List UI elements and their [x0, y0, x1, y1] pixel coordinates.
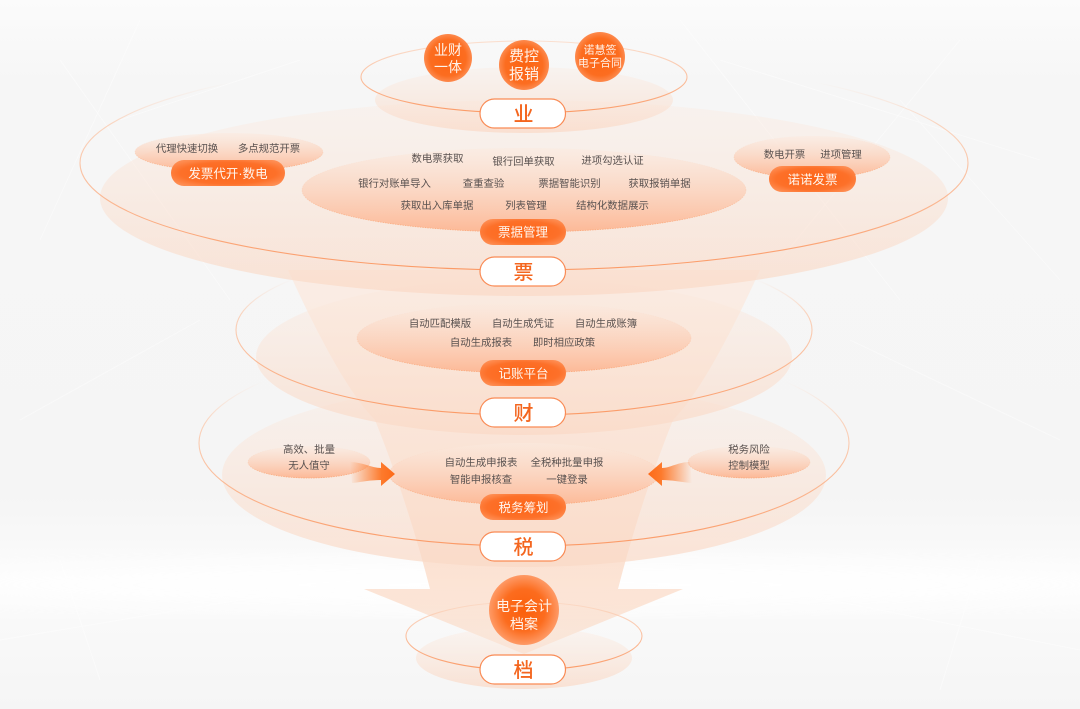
label pill: 税 — [480, 532, 566, 561]
label pill: 税: 税 — [514, 536, 534, 559]
disc: 财 — [256, 279, 792, 435]
panel: 诺诺发票: 数电开票 — [764, 148, 805, 161]
panel: 票据管理: 票据智能识别 — [538, 177, 601, 190]
circle: 诺慧签电子合同: 诺慧签 — [584, 42, 616, 56]
panel: 税务风险控制模型: 税务风险 — [728, 443, 770, 456]
panel: 票据管理: 银行回单获取 — [492, 155, 555, 168]
circle: 电子会计档案: 电子会计 — [496, 598, 552, 614]
panel: 记账平台: 自动匹配模版 — [409, 317, 471, 330]
circle: 诺慧签电子合同 — [575, 32, 625, 82]
panel: 票据管理: 结构化数据展示 — [576, 199, 649, 212]
layer: 税 — [199, 340, 849, 567]
panel: 票据管理: 数电票获取 — [412, 152, 464, 165]
panel: 发票代开·数电 — [135, 133, 323, 186]
panel: 记账平台: 即时相应政策 — [533, 336, 596, 349]
panel: 税务风险控制模型 — [688, 443, 810, 478]
ring: 财 — [236, 245, 812, 415]
panel: 票据管理: 获取出入库单据 — [401, 199, 473, 212]
disc: 业 — [375, 67, 673, 133]
circle: 业财一体 — [424, 34, 472, 82]
layer: 档 — [406, 575, 642, 689]
label pill: 业: 业 — [514, 103, 534, 126]
panel: 发票代开·数电: 发票代开·数电 — [188, 166, 268, 181]
arrow: left to center — [350, 462, 395, 486]
panel: 票据管理: 银行对账单导入 — [358, 177, 431, 190]
ring: 业 — [361, 41, 687, 113]
label pill: 档 — [480, 655, 566, 684]
panel: 票据管理: 票据管理 — [498, 224, 548, 240]
circle: 费控报销: 费控 — [509, 48, 539, 65]
panel: 高效批量无人值守 — [248, 443, 370, 478]
circle: 诺慧签电子合同: 电子合同 — [578, 56, 622, 70]
panel: 税务筹划: 全税种批量申报 — [531, 456, 603, 469]
layer: 票 — [80, 56, 968, 296]
panel: 税务筹划: 智能申报核查 — [450, 473, 513, 486]
panel: 记账平台: 自动生成报表 — [450, 336, 513, 349]
panel: 诺诺发票 — [734, 136, 890, 192]
panel: 票据管理: 列表管理 — [505, 199, 547, 212]
funnel with arrow — [288, 270, 760, 654]
label pill: 档: 档 — [514, 659, 534, 682]
panel: 税务筹划: 自动生成申报表 — [445, 456, 518, 469]
ring: 税 — [199, 340, 849, 546]
circle: 费控报销 — [499, 40, 549, 90]
panel: 记账平台 — [357, 303, 691, 386]
ring: 票 — [80, 56, 968, 270]
circle: 费控报销: 报销 — [509, 66, 539, 83]
label pill: 财 — [480, 398, 566, 427]
disc: 税 — [222, 383, 826, 567]
panel: 发票代开·数电: 多点规范开票 — [238, 142, 300, 155]
panel: 高效批量无人值守: 高效、批量 — [283, 443, 335, 456]
disc: 票 — [100, 100, 948, 296]
panel: 税务筹划: 税务筹划 — [498, 500, 549, 515]
panel: 票据管理: 获取报销单据 — [628, 177, 691, 190]
panel: 税务筹划 — [389, 443, 659, 520]
panel: 诺诺发票: 进项管理 — [820, 148, 862, 161]
panel: 税务风险控制模型: 控制模型 — [728, 459, 770, 472]
circle: 电子会计档案: 档案 — [510, 616, 538, 632]
panel: 税务筹划: 一键登录 — [546, 473, 588, 486]
layer: 财 — [236, 245, 812, 435]
circle: 业财一体: 业财 — [434, 42, 462, 58]
circle: 电子会计档案 — [489, 575, 559, 645]
disc: 档 — [416, 627, 632, 689]
label pill: 业 — [480, 99, 566, 128]
panel: 诺诺发票: 诺诺发票 — [787, 172, 838, 187]
label pill: 票 — [480, 257, 566, 286]
label pill: 财: 财 — [514, 402, 534, 425]
arrow: right to center — [648, 462, 692, 486]
circle: 业财一体: 一体 — [434, 59, 462, 75]
ring: 档 — [406, 602, 642, 670]
panel: 发票代开·数电: 代理快速切换 — [156, 142, 219, 155]
label pill: 票: 票 — [514, 262, 534, 284]
panel: 票据管理 — [302, 148, 746, 245]
panel: 记账平台: 自动生成凭证 — [492, 317, 554, 330]
panel: 票据管理: 查重查验 — [463, 177, 505, 190]
layer: 业 — [361, 32, 687, 133]
panel: 记账平台: 自动生成账簿 — [575, 317, 637, 330]
panel: 票据管理: 进项勾选认证 — [581, 154, 644, 167]
panel: 高效批量无人值守: 无人值守 — [288, 459, 330, 472]
panel: 记账平台: 记账平台 — [498, 366, 549, 381]
